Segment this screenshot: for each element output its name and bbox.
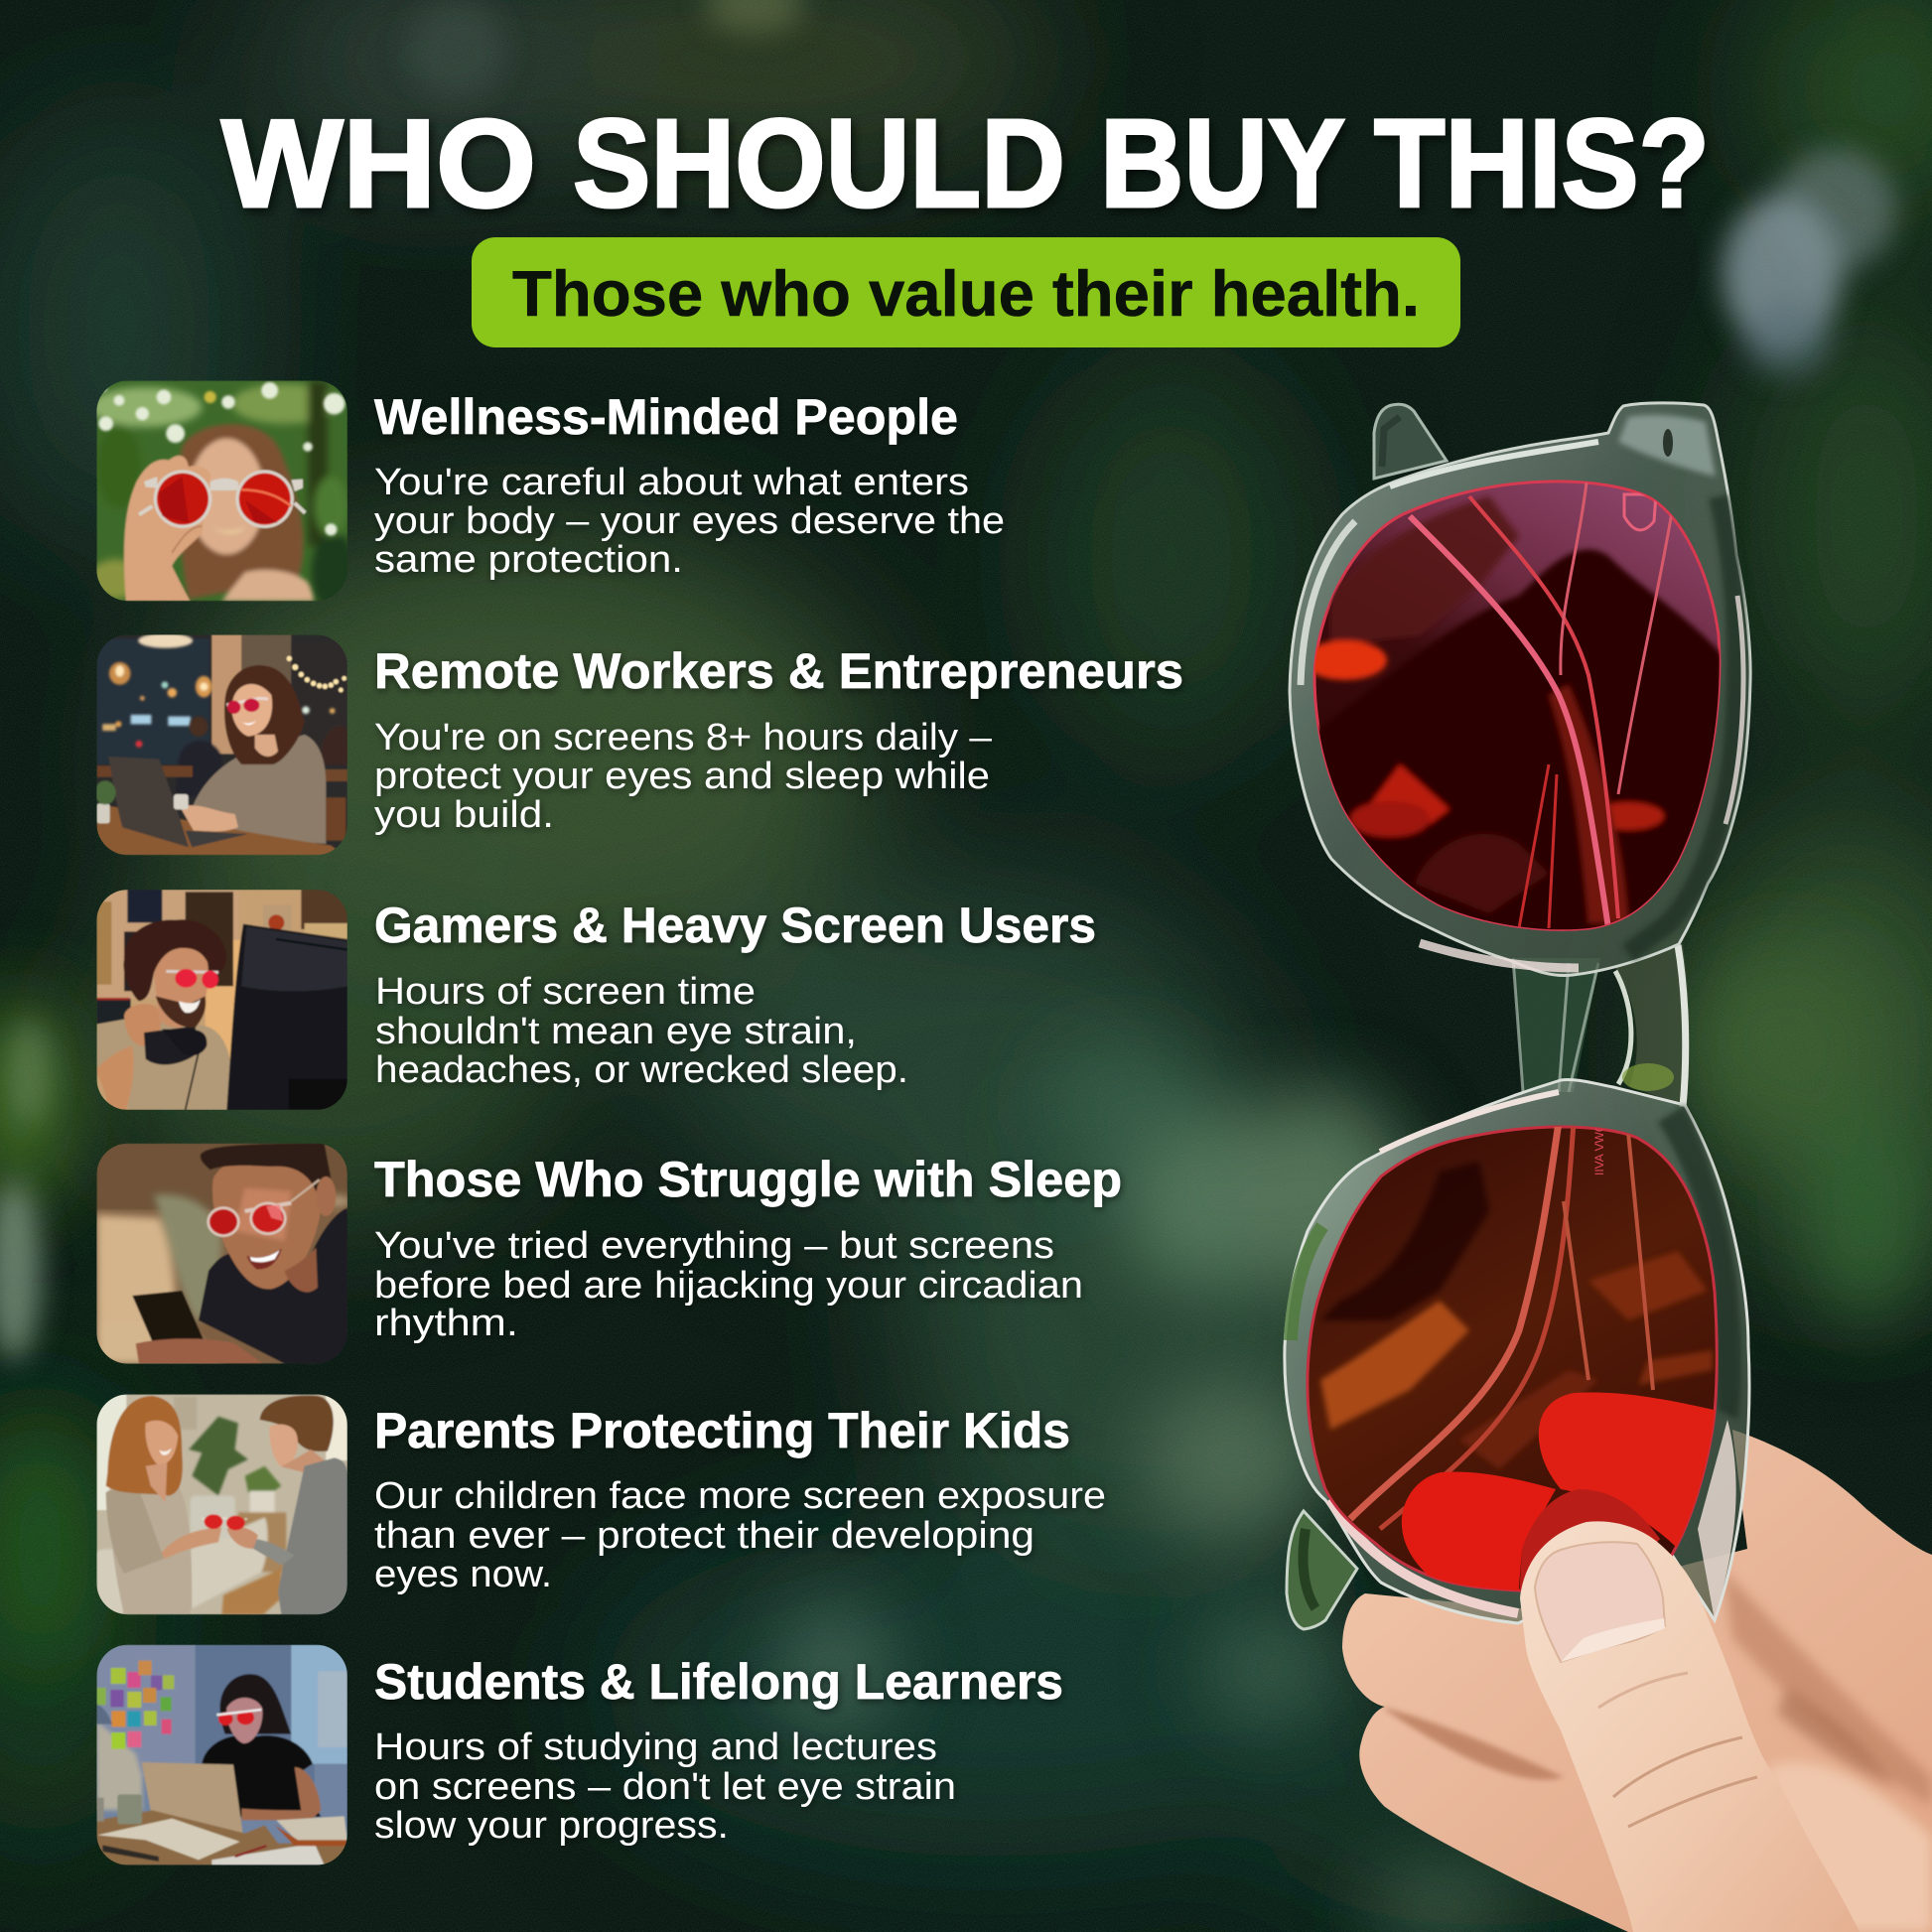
title: SHOULD bbox=[573, 93, 1065, 233]
item: Parents Protecting Their Kids: eyes now. bbox=[374, 1554, 552, 1595]
item: Those Who Struggle with Sleep: Those Who Struggle with Sleep bbox=[374, 1152, 1122, 1207]
item: Those Who Struggle with Sleep: before bed are hijacking your circadian bbox=[374, 1265, 1083, 1307]
item: Gamers & Heavy Screen Users: Hours of screen time bbox=[375, 971, 756, 1013]
item: Parents Protecting Their Kids bbox=[374, 1403, 1106, 1595]
item: Those Who Struggle with Sleep: rhythm. bbox=[374, 1303, 518, 1344]
item: Students & Lifelong Learners bbox=[374, 1654, 1063, 1847]
glasses: folded temple behind bridge bbox=[1513, 944, 1690, 1107]
item: Parents Protecting Their Kids: Our children face more screen exposure bbox=[374, 1475, 1106, 1517]
item: Remote Workers & Entrepreneurs bbox=[374, 643, 1183, 836]
glasses: bottom temple stub bbox=[1287, 1511, 1357, 1629]
subtitle pill bbox=[472, 237, 1460, 347]
item: Gamers & Heavy Screen Users: Gamers & Heavy Screen Users bbox=[374, 897, 1096, 953]
title: THIS? bbox=[1374, 93, 1710, 233]
item: Students & Lifelong Learners: Hours of studying and lectures bbox=[374, 1726, 937, 1768]
glasses: bottom frame and lens with red fingertips: IIVA VWOS bbox=[1592, 1115, 1606, 1175]
hand: thumb in front of the lens bbox=[1520, 1521, 1860, 1932]
item: Remote Workers & Entrepreneurs: protect your eyes and sleep while bbox=[374, 756, 990, 797]
item: Wellness-Minded People: your body – your eyes deserve the bbox=[374, 500, 1005, 542]
photo tile: student studying at laptop bbox=[96, 1645, 347, 1865]
photo tile: parent and teen in living room bbox=[96, 1394, 347, 1614]
item: Wellness-Minded People: You're careful about what enters bbox=[374, 462, 969, 503]
title bbox=[221, 93, 1710, 233]
item: Gamers & Heavy Screen Users bbox=[374, 897, 1096, 1091]
item: Those Who Struggle with Sleep bbox=[374, 1152, 1122, 1344]
photo tile: gamer with monitor bbox=[96, 890, 347, 1110]
glasses: top frame and lens bbox=[1290, 403, 1750, 976]
subtitle pill: Those who value their health. bbox=[512, 257, 1420, 330]
item: Students & Lifelong Learners: on screens – don't let eye strain bbox=[374, 1766, 956, 1808]
item: Remote Workers & Entrepreneurs: Remote Workers & Entrepreneurs bbox=[374, 643, 1183, 699]
item: Gamers & Heavy Screen Users: headaches, or wrecked sleep. bbox=[375, 1049, 908, 1091]
photo tile: man with phone in bed bbox=[96, 1144, 350, 1364]
item: Remote Workers & Entrepreneurs: you build. bbox=[374, 794, 554, 836]
item: Parents Protecting Their Kids: Parents Protecting Their Kids bbox=[374, 1403, 1070, 1458]
glasses: bottom frame and lens with red fingertips bbox=[1285, 1079, 1749, 1623]
item: Parents Protecting Their Kids: than ever – protect their developing bbox=[374, 1515, 1035, 1557]
title: BUY bbox=[1100, 93, 1345, 233]
item: Wellness-Minded People bbox=[374, 389, 1005, 581]
item: Those Who Struggle with Sleep: You've tried everything – but screens bbox=[374, 1225, 1054, 1267]
item: Gamers & Heavy Screen Users: shouldn't mean eye strain, bbox=[375, 1011, 857, 1052]
photo tile: remote worker in cafe bbox=[94, 633, 347, 855]
title: WHO bbox=[221, 93, 536, 233]
item: Wellness-Minded People: same protection. bbox=[374, 539, 683, 581]
hand behind the glasses bbox=[1342, 1430, 1932, 1932]
item: Students & Lifelong Learners: Students & Lifelong Learners bbox=[374, 1654, 1063, 1710]
item: Wellness-Minded People: Wellness-Minded People bbox=[374, 389, 958, 445]
glasses: top temple stub bbox=[1374, 404, 1447, 479]
item: Remote Workers & Entrepreneurs: You're on screens 8+ hours daily – bbox=[374, 717, 993, 759]
photo tile: wellness woman holding glasses bbox=[96, 380, 347, 602]
item: Students & Lifelong Learners: slow your progress. bbox=[374, 1805, 729, 1847]
